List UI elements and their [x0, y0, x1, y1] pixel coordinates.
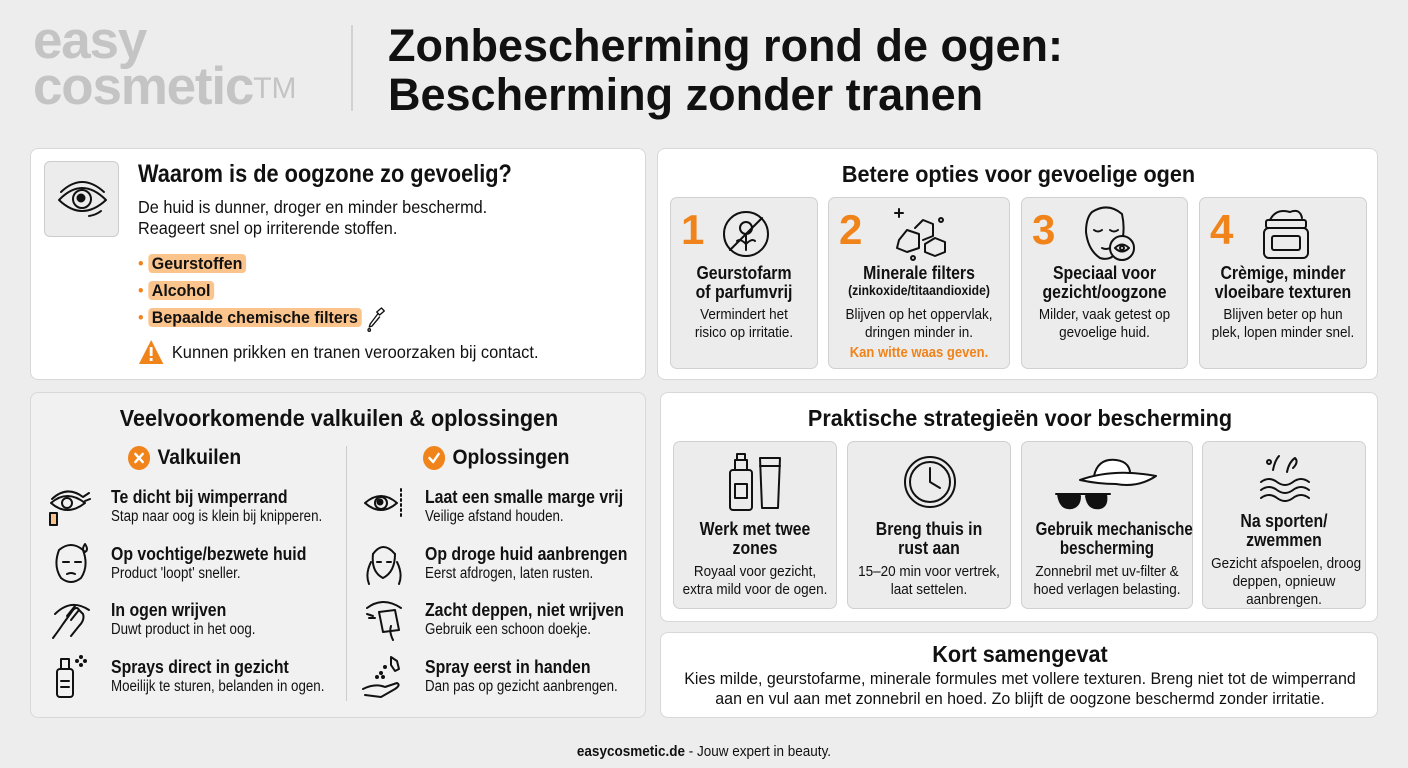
card 1: Vermindert het: [700, 306, 788, 323]
card 2: Kan witte waas geven.: [850, 345, 988, 361]
row: rubbing: In ogen wrijven: [111, 600, 226, 620]
card 2: Minerale filters: [863, 263, 975, 283]
subheading: pitfalls: Valkuilen: [157, 446, 241, 469]
card 2: [828, 197, 1010, 369]
pitfall list: [49, 487, 324, 698]
title: Bescherming zonder tranen: [388, 69, 983, 120]
card 4: Blijven beter op hun: [1223, 306, 1343, 323]
row: sprays: Moeilijk te sturen, belanden in ogen.: [111, 678, 324, 695]
card: two zones: Royaal voor gezicht,: [694, 563, 816, 580]
card 3: gevoelige huid.: [1059, 324, 1150, 341]
title: [388, 20, 1063, 120]
heading: Kort samengevat: [932, 641, 1108, 667]
row: dry skin: [366, 544, 627, 585]
card 2: Blijven op het oppervlak,: [845, 306, 993, 323]
card: apply at home: rust aan: [898, 538, 960, 558]
card: after sports: [1202, 441, 1366, 609]
card: mechanical protection: Zonnebril met uv-filter &: [1035, 563, 1179, 580]
row: spray hands: Spray eerst in handen: [425, 657, 590, 677]
row: sprays: [56, 655, 324, 698]
row: moist skin: [55, 543, 306, 583]
row: margin: Veilige afstand houden.: [425, 508, 564, 525]
bullet list: • Geurstoffen: [138, 254, 242, 273]
heading: Veelvoorkomende valkuilen & oplossingen: [120, 405, 558, 431]
card 1: Geurstofarm: [696, 263, 792, 283]
warning: Kunnen prikken en tranen veroorzaken bij contact.: [172, 342, 539, 362]
row: lash line: Stap naar oog is klein bij knipperen.: [111, 508, 322, 525]
row: dab: Zacht deppen, niet wrijven: [425, 600, 624, 620]
title: Zonbescherming rond de ogen:: [388, 20, 1063, 71]
row: moist skin: Product 'loopt' sneller.: [111, 565, 241, 582]
bullet list: [138, 254, 385, 332]
card: two zones: extra mild voor de ogen.: [683, 581, 827, 598]
panel: summary: [660, 632, 1378, 718]
card 4: Crèmige, minder: [1220, 263, 1345, 283]
bullet list: • Bepaalde chemische filters: [138, 308, 358, 327]
card 3: 3: [1032, 206, 1055, 253]
summary text: Kies milde, geurstofarme, minerale formules met vollere texturen. Breng niet tot de wimperrand: [684, 669, 1356, 688]
card: after sports: Na sporten/: [1240, 511, 1328, 531]
row: dab: Gebruik een schoon doekje.: [425, 621, 591, 638]
card 4: vloeibare texturen: [1215, 282, 1351, 302]
footer: easycosmetic.de - Jouw expert in beauty.: [577, 743, 831, 760]
card: apply at home: laat settelen.: [891, 581, 967, 598]
card: two zones: [673, 441, 837, 609]
card 1: of parfumvrij: [696, 282, 792, 302]
card 1: risico op irritatie.: [695, 324, 793, 341]
card 3: [1021, 197, 1188, 369]
row: rubbing: [52, 600, 256, 639]
card: after sports: deppen, opnieuw: [1233, 573, 1335, 590]
panel: pitfalls & solutions: [30, 392, 646, 718]
row: moist skin: Op vochtige/bezwete huid: [111, 544, 306, 564]
heading: Betere opties voor gevoelige ogen: [842, 161, 1195, 187]
card: apply at home: Breng thuis in: [876, 519, 982, 539]
card: two zones: Werk met twee: [700, 519, 810, 539]
row: margin: Laat een smalle marge vrij: [425, 487, 623, 507]
row: spray hands: Dan pas op gezicht aanbrengen.: [425, 678, 618, 695]
card: after sports: zwemmen: [1246, 530, 1322, 550]
heading: Waarom is de oogzone zo gevoelig?: [138, 160, 512, 188]
card 1: [670, 197, 818, 369]
panel: practical strategies: [660, 392, 1378, 622]
panel: better options: [657, 148, 1378, 380]
row: margin: [364, 487, 623, 525]
summary text: [684, 669, 1356, 708]
card: after sports: aanbrengen.: [1246, 591, 1322, 608]
logo: [33, 11, 297, 116]
card: mechanical protection: hoed verlagen belasting.: [1033, 581, 1181, 598]
row: dry skin: Op droge huid aanbrengen: [425, 544, 627, 564]
card: mechanical protection: Gebruik mechanische: [1036, 519, 1193, 539]
row: sprays: Sprays direct in gezicht: [111, 657, 289, 677]
logo: easy: [33, 11, 146, 70]
heading: Praktische strategieën voor bescherming: [808, 405, 1232, 431]
card 4: 4: [1210, 206, 1233, 253]
card: two zones: zones: [733, 538, 777, 558]
text: De huid is dunner, droger en minder beschermd.: [138, 197, 487, 217]
card 3: gezicht/oogzone: [1042, 282, 1167, 302]
row: dab: [366, 600, 624, 641]
row: spray hands: [362, 656, 618, 698]
row: lash line: Te dicht bij wimperrand: [111, 487, 288, 507]
solution list: [362, 487, 627, 698]
row: lash line: [49, 487, 322, 526]
card 3: Speciaal voor: [1053, 263, 1156, 283]
card 3: Milder, vaak getest op: [1039, 306, 1170, 323]
subheading: solutions: Oplossingen: [452, 446, 569, 469]
card 2: 2: [839, 206, 862, 253]
summary text: aan en vul aan met zonnebril en hoed. Zo blijft de oogzone beschermd zonder irritatie.: [715, 689, 1325, 708]
card: mechanical protection: [1021, 441, 1193, 609]
bullet list: • Alcohol: [138, 281, 210, 300]
text: [138, 197, 487, 238]
card 4: plek, lopen minder snel.: [1212, 324, 1354, 341]
card: after sports: Gezicht afspoelen, droog: [1211, 555, 1361, 572]
text: Reageert snel op irriterende stoffen.: [138, 218, 397, 238]
card 2: dringen minder in.: [865, 324, 973, 341]
card 4: [1199, 197, 1367, 369]
card 1: 1: [681, 206, 704, 253]
panel: why sensitive: [30, 148, 646, 380]
icon: eye: [44, 161, 119, 237]
card: mechanical protection: bescherming: [1060, 538, 1154, 558]
card: apply at home: 15–20 min voor vertrek,: [858, 563, 1000, 580]
row: dry skin: Eerst afdrogen, laten rusten.: [425, 565, 593, 582]
logo: cosmeticTM: [33, 57, 297, 116]
card 2: (zinkoxide/titaandioxide): [848, 283, 990, 298]
row: rubbing: Duwt product in het oog.: [111, 621, 256, 638]
card: apply at home: [847, 441, 1011, 609]
